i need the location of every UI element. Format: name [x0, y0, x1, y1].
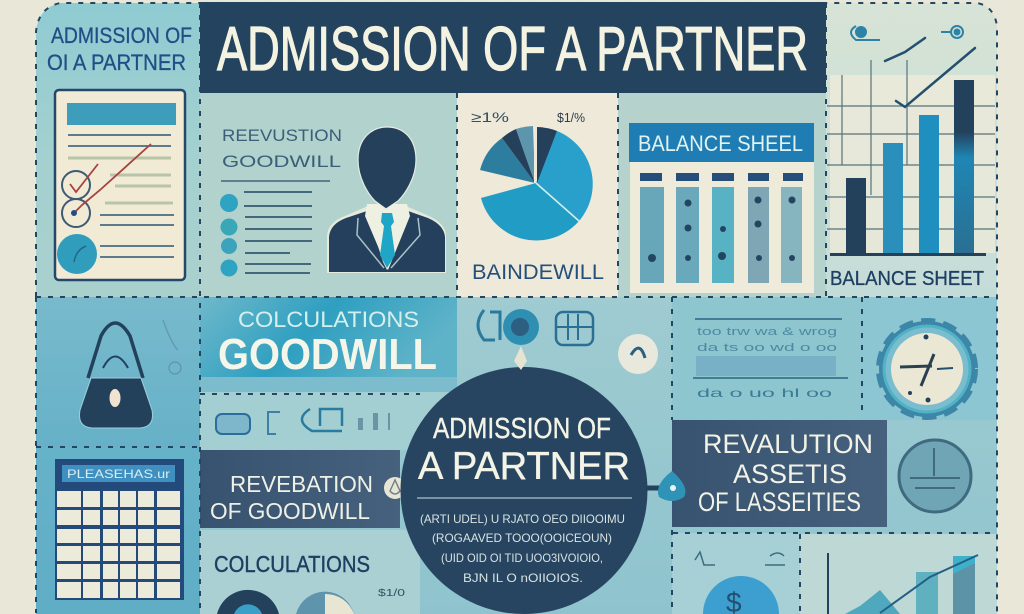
- sidebar heading: OI A PARTNER: [47, 50, 186, 75]
- panel: balance sheet table: [618, 93, 826, 297]
- panel: lower line chart: [800, 534, 997, 614]
- trend arrows: [885, 38, 975, 107]
- rising bars: [845, 556, 975, 614]
- percent label top right: $1/%: [557, 110, 585, 125]
- connector icon right: [646, 471, 686, 501]
- small percent label: $1/0: [378, 588, 406, 599]
- circle heading: A PARTNER: [418, 445, 630, 488]
- title banner: [200, 2, 826, 93]
- circle body text: (ARTI UDEL) U RJATO OEO DIIOOIMU: [420, 512, 625, 526]
- panel: revaluation assets: [672, 420, 887, 527]
- title banner: ADMISSION OF A PARTNER: [217, 15, 808, 84]
- pie chart: [480, 126, 593, 240]
- icons above circle: [478, 309, 658, 374]
- icon: person silhouette: [327, 127, 446, 273]
- balance sheet header: [629, 123, 814, 162]
- calendar icon: PLEASEHAS.ur: [67, 467, 170, 481]
- icon: round coin: [899, 440, 971, 512]
- sidebar heading: ADMISSION OF: [51, 23, 192, 48]
- sidebar heading: [47, 23, 192, 75]
- calculations subtitle: COLCULATIONS: [238, 307, 419, 332]
- panel: table sketch: too trw wa & wrog: [697, 326, 837, 338]
- chart icons: [851, 26, 963, 40]
- revaluation heading: [222, 126, 342, 171]
- panel: revaluation assets: OF LASSEITIES: [698, 487, 861, 517]
- panel: pie chart: [457, 93, 618, 297]
- panel: revaluation assets: ASSETIS: [733, 459, 847, 489]
- bars: [830, 80, 986, 256]
- panel: table sketch: da o uo hl oo: [697, 386, 833, 400]
- panel: revelation of goodwill: OF GOODWILL: [210, 498, 370, 524]
- panel: revaluation assets: REVALUTION: [703, 429, 873, 459]
- icon: checklist document: [55, 90, 185, 280]
- circle body text: (ROGAAVED TOOO(OOICEOUN): [432, 531, 612, 545]
- circle body text: [420, 512, 625, 585]
- panel: revaluation goodwill with person: [200, 93, 457, 297]
- goodwill heading: GOODWILL: [218, 330, 437, 379]
- lower background: [200, 297, 997, 614]
- calculations heading: COLCULATIONS: [214, 551, 370, 577]
- small faint icon: [163, 320, 181, 374]
- panel: bar chart balance sheet: [826, 3, 997, 297]
- panel: lock icon: [36, 297, 200, 447]
- panel: calculations lower: [200, 530, 420, 614]
- pie label: BAINDEWILL: [472, 261, 604, 284]
- icon: padlock bag: [80, 323, 152, 428]
- revaluation heading: GOODWILL: [222, 152, 341, 171]
- percent label top left: ≥1%: [471, 109, 509, 125]
- trend line: [880, 555, 978, 613]
- icon strip: [200, 392, 457, 450]
- panel: table sketch: da ts oo wd o oo: [697, 342, 837, 354]
- connector icon left: [384, 477, 406, 499]
- panel: calendar: [36, 447, 200, 614]
- panel: table sketch: [672, 297, 862, 420]
- calendar icon: [55, 459, 184, 600]
- balance sheet header: BALANCE SHEEL: [638, 131, 803, 156]
- panel: clock: [862, 297, 997, 420]
- panel: admission sidebar: [36, 3, 200, 297]
- circle body text: BJN IL O nOIIOIOS.: [463, 571, 583, 585]
- panel: central circle: [400, 367, 648, 614]
- bullet list: [220, 181, 330, 276]
- panel: dollar gauge: [672, 533, 800, 614]
- circle heading: ADMISSION OF: [433, 413, 611, 445]
- grid lines: [827, 60, 995, 229]
- mini pie right: [296, 592, 354, 614]
- revaluation heading: REEVUSTION: [222, 126, 342, 145]
- bar chart caption: BALANCE SHEET: [830, 268, 984, 290]
- panel: goodwill banner: [200, 297, 457, 392]
- table columns: [640, 173, 803, 283]
- panel: revelation of goodwill: [200, 450, 400, 528]
- panel: revelation of goodwill: REVEBATION: [230, 471, 373, 497]
- circle heading: [418, 413, 630, 488]
- circle body text: (UID OID OI TID UOO3IVOIOIO,: [441, 551, 603, 565]
- mini pie left: [217, 590, 279, 614]
- icon: clock with gear: [879, 321, 975, 417]
